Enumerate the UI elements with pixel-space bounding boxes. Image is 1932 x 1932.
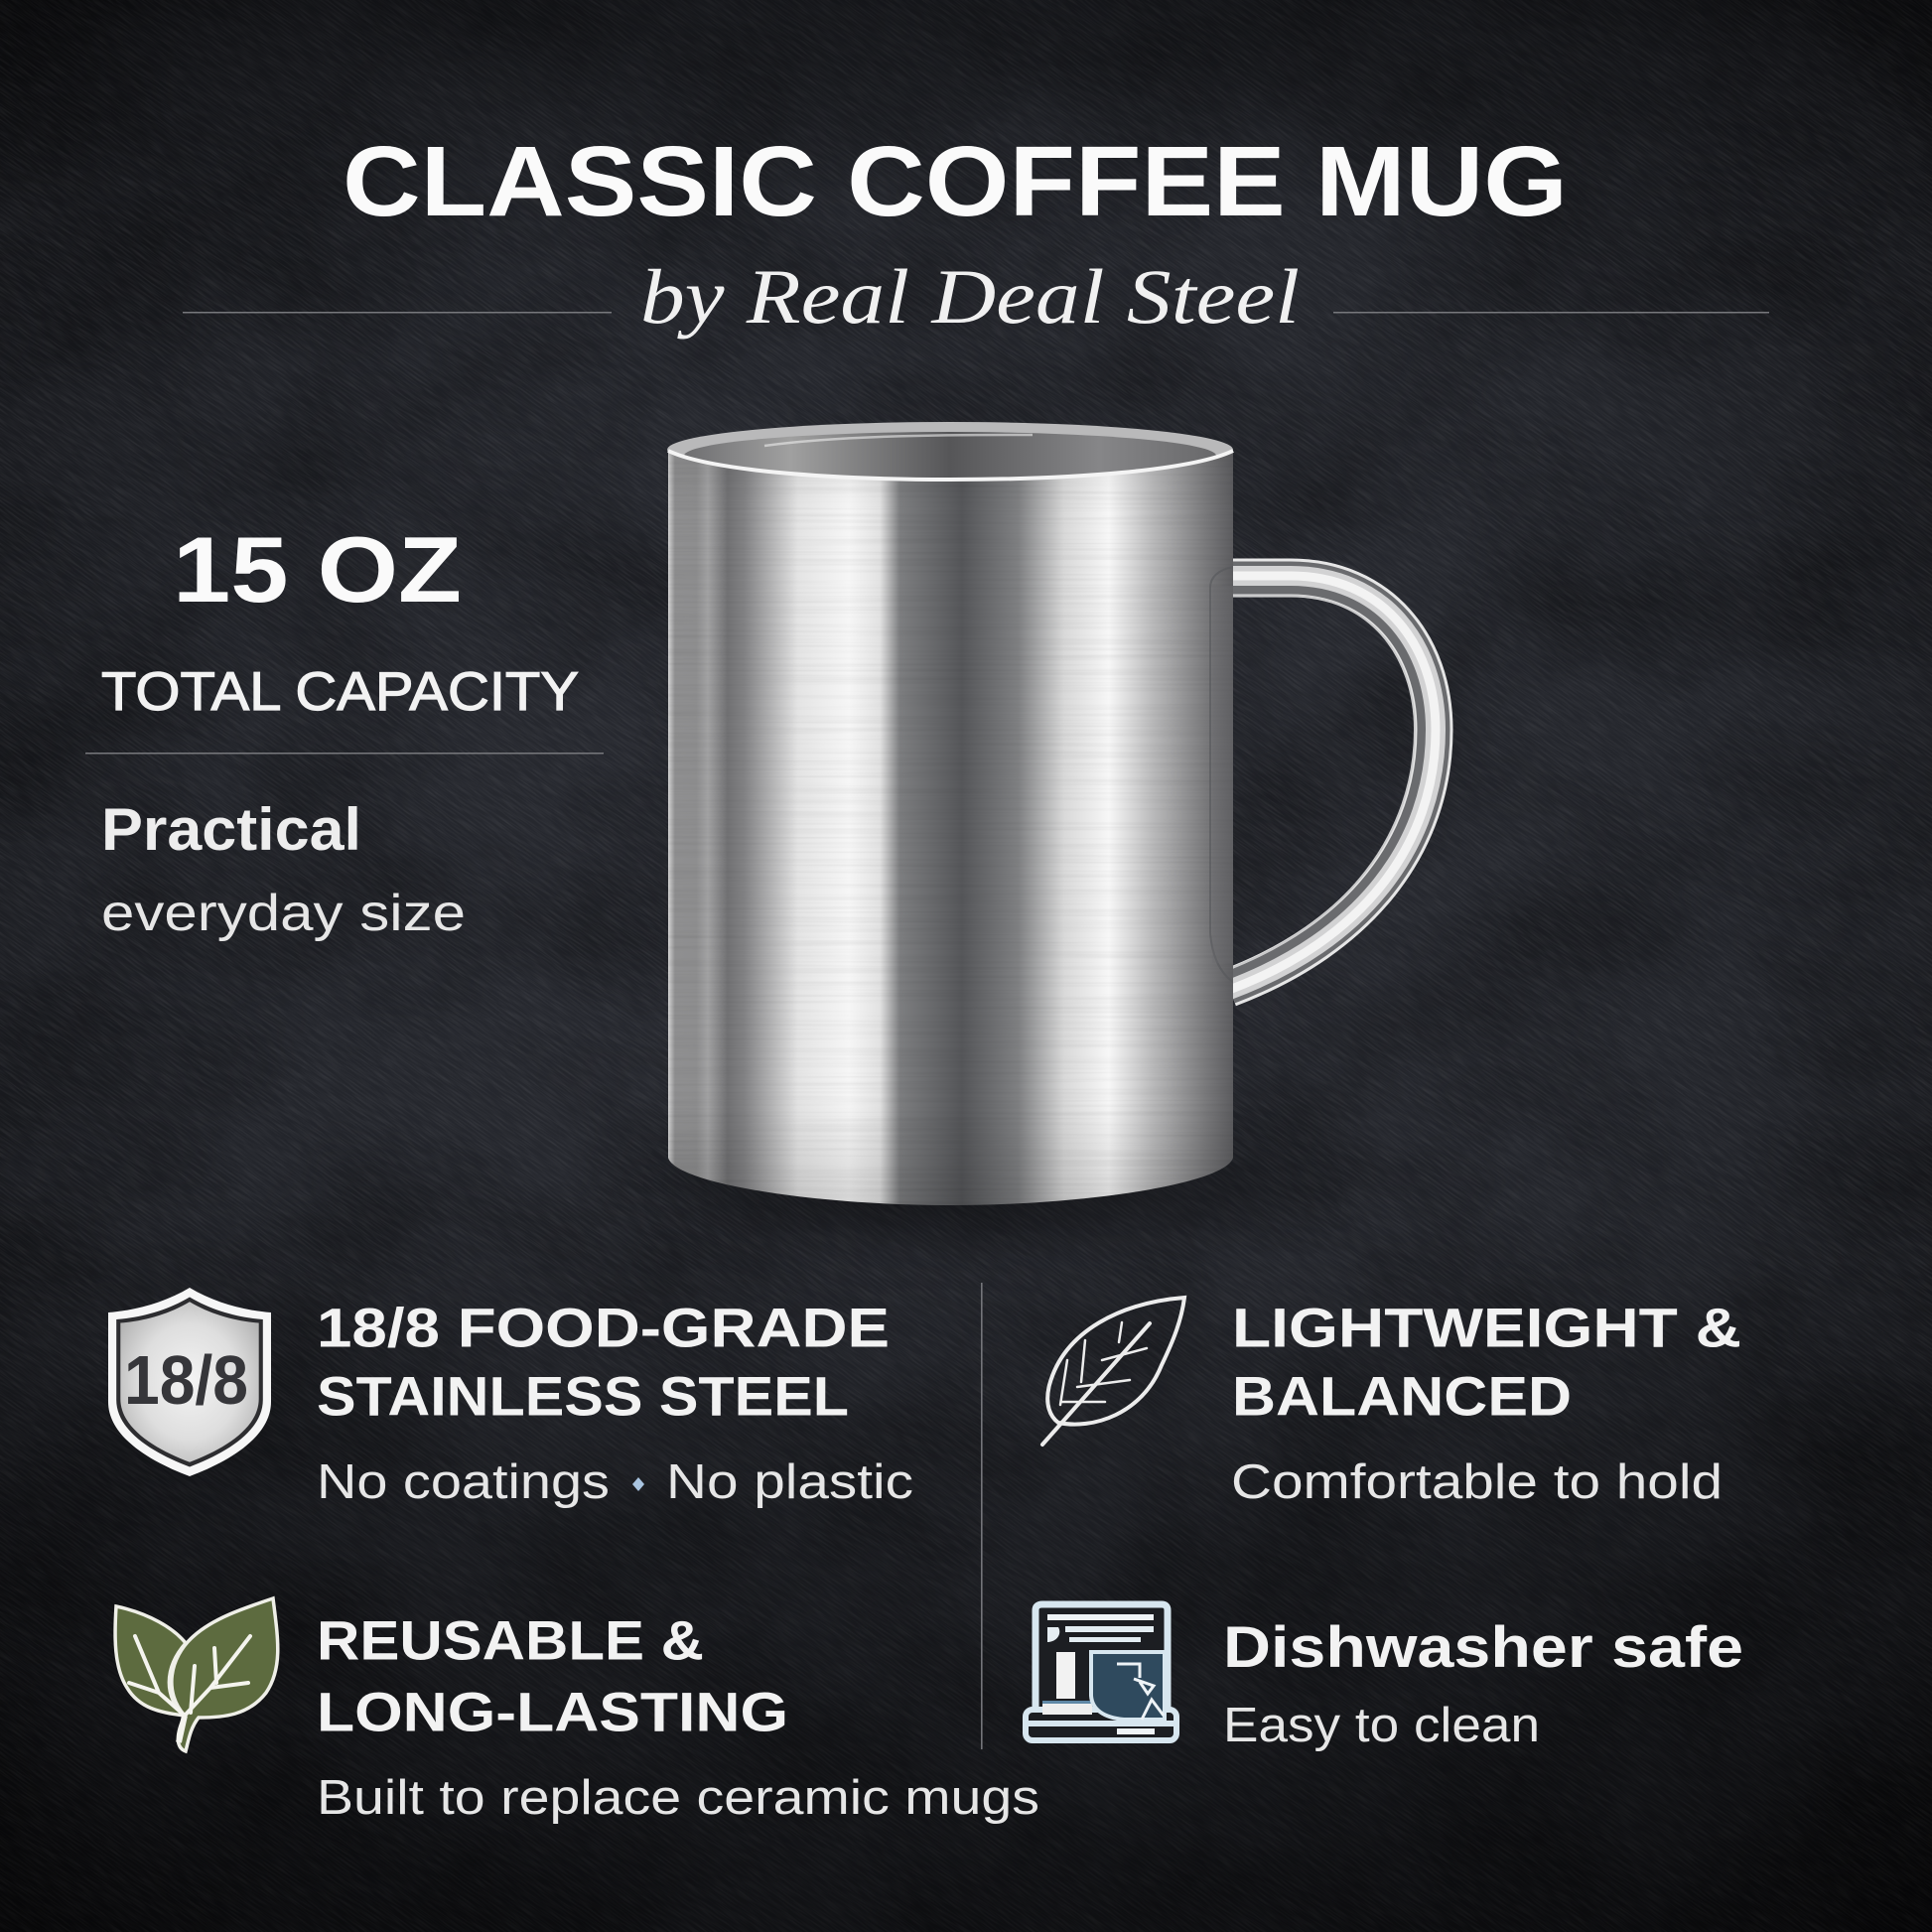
capacity panel [85, 517, 604, 942]
feature: stainless steel [108, 1288, 913, 1509]
heading line 2: LONG-LASTING [317, 1680, 788, 1743]
icon: 18/8 shield: 18/8 [124, 1341, 248, 1419]
heading: REUSABLE & [317, 1608, 704, 1672]
title: CLASSIC COFFEE MUG [343, 126, 1568, 237]
description: No coatings [317, 1455, 610, 1509]
description: Built to replace ceramic mugs [317, 1771, 1039, 1825]
icon: 18/8 shield [108, 1288, 271, 1476]
stainless steel mug [667, 417, 1436, 1211]
capacity value: 15 OZ [173, 517, 462, 621]
capacity label: TOTAL CAPACITY [101, 660, 579, 722]
description: Comfortable to hold [1231, 1455, 1723, 1509]
feature: lightweight [1042, 1297, 1741, 1509]
feature: dishwasher safe [1026, 1604, 1743, 1752]
subtitle rule right [1333, 312, 1769, 314]
practical description: everyday size [101, 885, 466, 942]
mug interior [667, 422, 1233, 480]
separator dot [632, 1477, 644, 1491]
heading line 2: BALANCED [1232, 1364, 1572, 1428]
heading: Dishwasher safe [1223, 1615, 1743, 1680]
icon: green leaves [115, 1598, 278, 1751]
subtitle: by Real Deal Steel [640, 253, 1300, 340]
center divider [981, 1283, 983, 1749]
heading: LIGHTWEIGHT & [1232, 1297, 1741, 1358]
icon: outline leaf [1042, 1298, 1184, 1445]
mug body [668, 417, 1233, 1211]
mug shadow [695, 1158, 1291, 1225]
heading: 18/8 FOOD-GRADE [317, 1297, 890, 1358]
heading line 2: STAINLESS STEEL [317, 1364, 849, 1428]
practical label: Practical [101, 796, 361, 863]
capacity divider [85, 753, 604, 755]
subtitle rule left [183, 312, 612, 314]
description 2: No plastic [666, 1455, 913, 1509]
feature: reusable [115, 1598, 1039, 1825]
mug handle [1229, 576, 1436, 990]
icon: dishwasher [1026, 1604, 1176, 1740]
description: Easy to clean [1223, 1699, 1540, 1752]
